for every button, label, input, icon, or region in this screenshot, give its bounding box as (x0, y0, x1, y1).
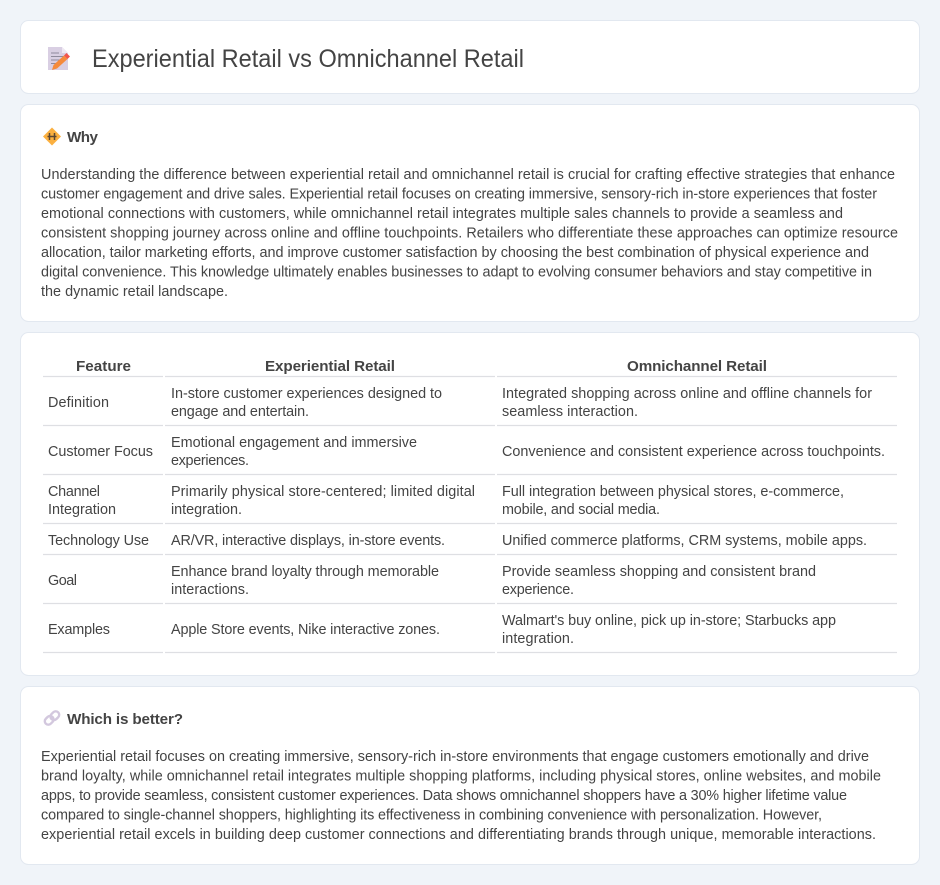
text block: which is better paragraph: compared to single-channel shoppers, highlighting its effectiveness in combining convenience with personalization. However, (41, 808, 822, 824)
table row: channel integration: integration. (171, 502, 242, 518)
text block: which is better paragraph: Experiential retail focuses on creating immersive, sensory-rich in-store environments that engage customers emotionally and drive (41, 749, 869, 765)
table row: examples: integration. (502, 631, 574, 647)
text block: which is better paragraph (41, 749, 881, 843)
table row: examples: Examples (48, 622, 110, 638)
text block: why paragraph: digital convenience. This knowledge ultimately enables businesses to adapt to evolving consumer behaviors and stay competitive in (41, 264, 872, 280)
text block: which is better paragraph: experiential retail excels in building deep customer connections and differentiating brands through unique, memorable interactions. (41, 827, 876, 843)
icon: orange diamond sign (43, 128, 61, 146)
table row: technology use: AR/VR, interactive displays, in-store events. (171, 533, 445, 549)
panel: header (20, 20, 920, 94)
table row: examples (48, 613, 836, 647)
table row: definition: Integrated shopping across online and offline channels for (502, 386, 872, 402)
table row: channel integration: Primarily physical store-centered; limited digital (171, 484, 475, 500)
table row: customer focus: Emotional engagement and immersive (171, 435, 417, 451)
table row: goal: interactions. (171, 582, 249, 598)
table row: technology use: Technology Use (48, 533, 149, 549)
text block: which is better paragraph: brand loyalty, while omnichannel retail integrates multiple shopping platforms, including physical stores, online websites, and mobile (41, 768, 881, 784)
table row: goal (48, 564, 816, 598)
table row: goal: experience. (502, 582, 574, 598)
text block: why paragraph: allocation, tailor marketing efforts, and improve customer satisfaction by choosing the best combination of physical experience and (41, 245, 869, 261)
table row: definition: Definition (48, 395, 109, 411)
table header row: Experiential Retail (265, 358, 395, 375)
table header row: Omnichannel Retail (627, 358, 767, 375)
text block: why paragraph (41, 167, 898, 300)
text block: which is better paragraph: apps, to provide seamless, consistent customer experiences. Data shows omnichannel shoppers have a 30% higher lifetime value (41, 788, 847, 804)
panel: why (20, 104, 920, 322)
text block: why paragraph: consistent shopping journey across online and offline touchpoints. Retailers who differentiate these approaches can optimize resource (41, 226, 898, 242)
table row: customer focus: Customer Focus (48, 444, 153, 460)
table row: channel integration: Full integration between physical stores, e-commerce, (502, 484, 844, 500)
table row: channel integration: mobile, and social media. (502, 502, 660, 518)
text block: why paragraph: customer engagement and drive sales. Experiential retail focuses on creating immersive, sensory-rich in-store experiences that foster (41, 186, 877, 202)
table row: goal: Enhance brand loyalty through memorable (171, 564, 439, 580)
table header row: Feature (76, 358, 131, 375)
table row: definition: seamless interaction. (502, 404, 638, 420)
text block: why paragraph: Understanding the difference between experiential retail and omnichannel retail is crucial for crafting effective strategies that enhance (41, 167, 895, 183)
table row: customer focus (48, 435, 885, 469)
table row: channel integration (48, 484, 844, 518)
heading: why: Why (67, 129, 99, 146)
panel: which is better (20, 686, 920, 864)
text block: why paragraph: the dynamic retail landscape. (41, 284, 228, 300)
table row: channel integration: Channel (48, 484, 100, 500)
table row: technology use: Unified commerce platforms, CRM systems, mobile apps. (502, 533, 867, 549)
table row: customer focus: experiences. (171, 453, 249, 469)
table row: examples: Apple Store events, Nike interactive zones. (171, 622, 440, 638)
icon: document with pencil (48, 47, 70, 70)
table row: definition: engage and entertain. (171, 404, 309, 420)
table row: examples: Walmart's buy online, pick up in-store; Starbucks app (502, 613, 836, 629)
table row: definition: In-store customer experiences designed to (171, 386, 442, 402)
table row: goal: Goal (48, 573, 77, 589)
table row: technology use (48, 533, 867, 549)
icon: link (43, 710, 61, 726)
table row: goal: Provide seamless shopping and consistent brand (502, 564, 816, 580)
table row: channel integration: Integration (48, 502, 116, 518)
table row: definition (48, 386, 872, 420)
text block: why paragraph: emotional connections with customers, while omnichannel retail integrates multiple sales channels to provide a seamless and (41, 206, 843, 222)
panel: comparison table (20, 332, 920, 676)
table row: customer focus: Convenience and consistent experience across touchpoints. (502, 444, 885, 460)
title: Experiential Retail vs Omnichannel Retail (92, 45, 524, 73)
heading: which is better: Which is better? (67, 711, 183, 728)
table header row (76, 358, 767, 375)
